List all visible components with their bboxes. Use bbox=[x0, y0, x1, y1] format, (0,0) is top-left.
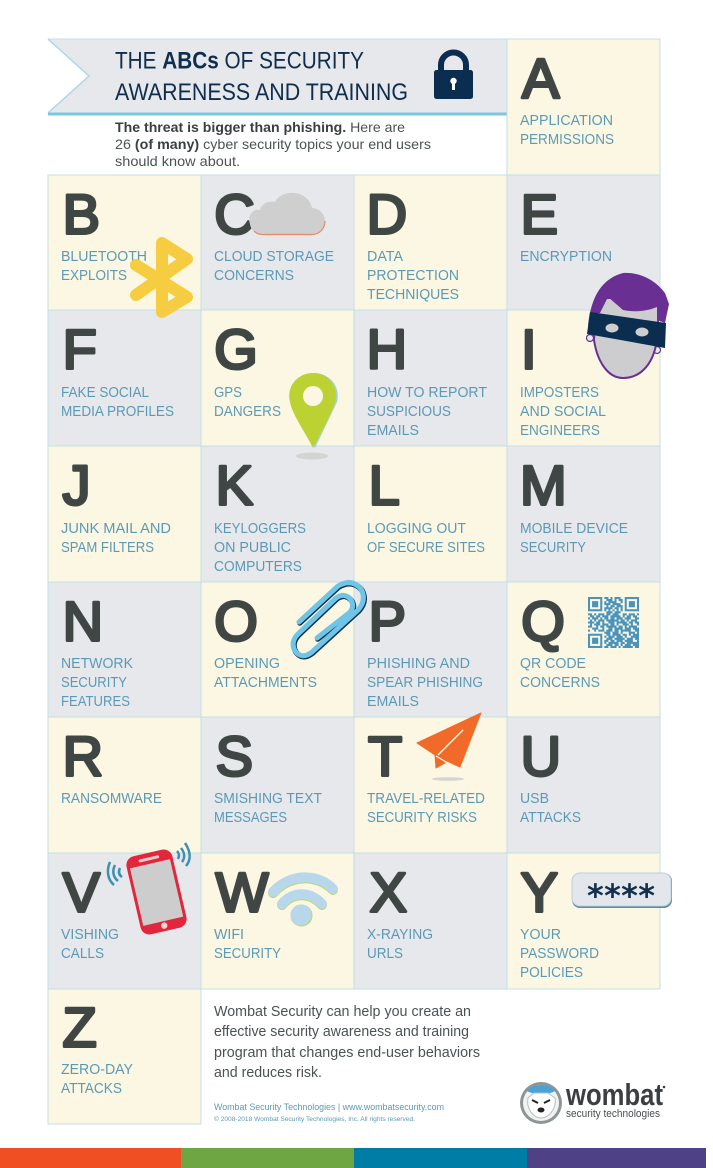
panel: I: AND SOCIAL bbox=[520, 403, 606, 420]
panel: J: JUNK MAIL AND bbox=[61, 520, 171, 537]
footer credits: © 2008-2018 Wombat Security Technologies, Inc. All rights reserved. bbox=[214, 1115, 415, 1123]
icon: bluetooth bbox=[136, 243, 187, 312]
panel: O: ATTACHMENTS bbox=[214, 674, 317, 691]
panel: G: G bbox=[214, 318, 258, 380]
icon: cloud bbox=[249, 193, 325, 234]
panel: U: ATTACKS bbox=[520, 809, 581, 826]
panel: E: ENCRYPTION bbox=[520, 248, 612, 265]
panel: M bbox=[507, 446, 660, 582]
panel: J: SPAM FILTERS bbox=[61, 539, 154, 556]
panel: M: SECURITY bbox=[520, 539, 586, 556]
panel: H: H bbox=[367, 318, 407, 380]
panel: I: IMPOSTERS bbox=[520, 384, 599, 401]
panel: F bbox=[48, 310, 201, 446]
panel: N: FEATURES bbox=[61, 693, 130, 710]
panel: G bbox=[201, 310, 354, 446]
closing text: Wombat Security can help you create an bbox=[214, 1004, 471, 1020]
title banner: THE ABCs OF SECURITY bbox=[115, 48, 364, 74]
panel: E: E bbox=[521, 182, 558, 246]
panel: F: FAKE SOCIAL bbox=[61, 384, 149, 401]
intro text bbox=[115, 119, 431, 169]
panel: K: K bbox=[216, 454, 253, 516]
panel: O bbox=[201, 582, 354, 717]
panel: P: P bbox=[369, 590, 406, 652]
panel: I: I bbox=[521, 318, 537, 380]
panel: C: CLOUD STORAGE bbox=[214, 248, 334, 265]
icon: password field: **** bbox=[587, 877, 655, 915]
wombat logo bbox=[520, 1077, 665, 1124]
icon: password field bbox=[572, 873, 672, 915]
panel: P bbox=[354, 582, 507, 717]
closing text: program that changes end-user behaviors bbox=[214, 1045, 480, 1061]
panel: N: SECURITY bbox=[61, 674, 127, 691]
panel: J: J bbox=[62, 454, 90, 516]
panel: X: URLS bbox=[367, 945, 403, 962]
panel: M: MOBILE DEVICE bbox=[520, 520, 628, 537]
panel: Y: PASSWORD bbox=[520, 945, 599, 962]
panel: C: CONCERNS bbox=[214, 267, 294, 284]
icon: padlock bbox=[434, 52, 473, 99]
panel: H: EMAILS bbox=[367, 422, 419, 439]
panel: Q: CONCERNS bbox=[520, 674, 600, 691]
icon: map pin bbox=[289, 373, 338, 460]
panel: R bbox=[48, 717, 201, 853]
panel: K: KEYLOGGERS bbox=[214, 520, 306, 537]
panel: A: A bbox=[522, 46, 560, 110]
icon: vibrating phone bbox=[108, 843, 190, 936]
panel: K: ON PUBLIC bbox=[214, 539, 291, 556]
panel: G: DANGERS bbox=[214, 403, 281, 420]
panel: K bbox=[201, 446, 354, 582]
panel: V bbox=[48, 853, 201, 989]
closing text: effective security awareness and training bbox=[214, 1024, 469, 1040]
panel: F: F bbox=[63, 318, 97, 380]
panel: T: T bbox=[368, 724, 402, 788]
panel: B: BLUETOOTH bbox=[61, 248, 147, 265]
footer credits: Wombat Security Technologies | www.wombatsecurity.com bbox=[214, 1102, 444, 1113]
panel: S: S bbox=[216, 724, 253, 788]
panel: O: O bbox=[214, 590, 258, 652]
panel: Y: Y bbox=[521, 860, 558, 924]
panel: B: B bbox=[63, 182, 100, 246]
panel: W: WIFI bbox=[214, 926, 244, 943]
panel: L: OF SECURE SITES bbox=[367, 539, 485, 556]
icon: wifi signal bbox=[273, 877, 333, 926]
wombat logo: wombat bbox=[565, 1077, 663, 1112]
icon: paperclip bbox=[293, 583, 364, 657]
panel: W: W bbox=[216, 860, 269, 924]
panel: Q: Q bbox=[521, 590, 565, 652]
panel: F: MEDIA PROFILES bbox=[61, 403, 174, 420]
panel: X bbox=[354, 853, 507, 989]
intro text: should know about. bbox=[115, 153, 240, 169]
panel: Z: ZERO-DAY bbox=[61, 1061, 133, 1078]
panel: N bbox=[48, 582, 201, 717]
panel: S: MESSAGES bbox=[214, 809, 287, 826]
panel: N: NETWORK bbox=[61, 655, 133, 672]
panel: A bbox=[507, 39, 660, 175]
wombat logo: security technologies bbox=[566, 1108, 660, 1120]
panel: D: PROTECTION bbox=[367, 267, 459, 284]
panel: P: EMAILS bbox=[367, 693, 419, 710]
panel: J bbox=[48, 446, 201, 582]
panel: H: HOW TO REPORT bbox=[367, 384, 487, 401]
panel: D: TECHNIQUES bbox=[367, 286, 459, 303]
panel: Q bbox=[507, 582, 660, 717]
intro text: The threat is bigger than phishing. Here are bbox=[115, 119, 405, 135]
panel: I bbox=[507, 310, 660, 446]
panel: L: LOGGING OUT bbox=[367, 520, 466, 537]
panel: L: L bbox=[369, 454, 400, 516]
intro text: 26 (of many) cyber security topics your end users bbox=[115, 136, 431, 152]
panel: W: SECURITY bbox=[214, 945, 281, 962]
footer credits bbox=[214, 1102, 444, 1123]
panel: X: X bbox=[370, 860, 407, 924]
panel: Y bbox=[507, 853, 660, 989]
panel: T: TRAVEL-RELATED bbox=[367, 790, 485, 807]
panel: Y: POLICIES bbox=[520, 964, 583, 981]
panel: D: DATA bbox=[367, 248, 403, 265]
panel: A: APPLICATION bbox=[520, 112, 613, 129]
panel: U bbox=[507, 717, 660, 853]
icon: QR code bbox=[588, 598, 639, 647]
panel: C: C bbox=[214, 182, 255, 246]
colour bar bbox=[0, 1148, 706, 1168]
panel: V: VISHING bbox=[61, 926, 119, 943]
title banner: AWARENESS AND TRAINING bbox=[115, 79, 408, 106]
panel: P: PHISHING AND bbox=[367, 655, 470, 672]
panel: T: SECURITY RISKS bbox=[367, 809, 477, 826]
closing text: and reduces risk. bbox=[214, 1065, 322, 1081]
panel: S: SMISHING TEXT bbox=[214, 790, 322, 807]
panel: W bbox=[201, 853, 354, 989]
panel: S bbox=[201, 717, 354, 853]
panel: E bbox=[507, 175, 660, 310]
panel: P: SPEAR PHISHING bbox=[367, 674, 483, 691]
panel: V: V bbox=[63, 860, 101, 924]
panel: H bbox=[354, 310, 507, 446]
panel: Z: Z bbox=[62, 996, 97, 1058]
panel: Z: ATTACKS bbox=[61, 1080, 122, 1097]
panel: I: ENGINEERS bbox=[520, 422, 600, 439]
icon: masked imposter bbox=[586, 273, 669, 378]
panel: L bbox=[354, 446, 507, 582]
panel: H: SUSPICIOUS bbox=[367, 403, 451, 420]
panel: B: EXPLOITS bbox=[61, 267, 127, 284]
panel: G: GPS bbox=[214, 384, 242, 401]
panel: U: USB bbox=[520, 790, 549, 807]
title banner bbox=[48, 39, 507, 116]
panel: A: PERMISSIONS bbox=[520, 131, 614, 148]
panel: B bbox=[48, 175, 201, 310]
panel: O: OPENING bbox=[214, 655, 280, 672]
closing text bbox=[214, 1004, 480, 1081]
icon: paper plane bbox=[417, 713, 481, 781]
panel: R: RANSOMWARE bbox=[61, 790, 162, 807]
panel: X: X-RAYING bbox=[367, 926, 433, 943]
panel: T bbox=[354, 717, 507, 853]
panel: Q: QR CODE bbox=[520, 655, 586, 672]
panel: N: N bbox=[63, 590, 103, 652]
panel: U: U bbox=[521, 724, 561, 788]
panel: M: M bbox=[520, 454, 567, 516]
panel: D bbox=[354, 175, 507, 310]
panel: K: COMPUTERS bbox=[214, 558, 302, 575]
panel: R: R bbox=[63, 724, 103, 788]
panel: V: CALLS bbox=[61, 945, 104, 962]
panel: Z bbox=[48, 989, 201, 1124]
panel: C bbox=[201, 175, 354, 310]
panel: D: D bbox=[367, 182, 407, 246]
panel: Y: YOUR bbox=[520, 926, 561, 943]
